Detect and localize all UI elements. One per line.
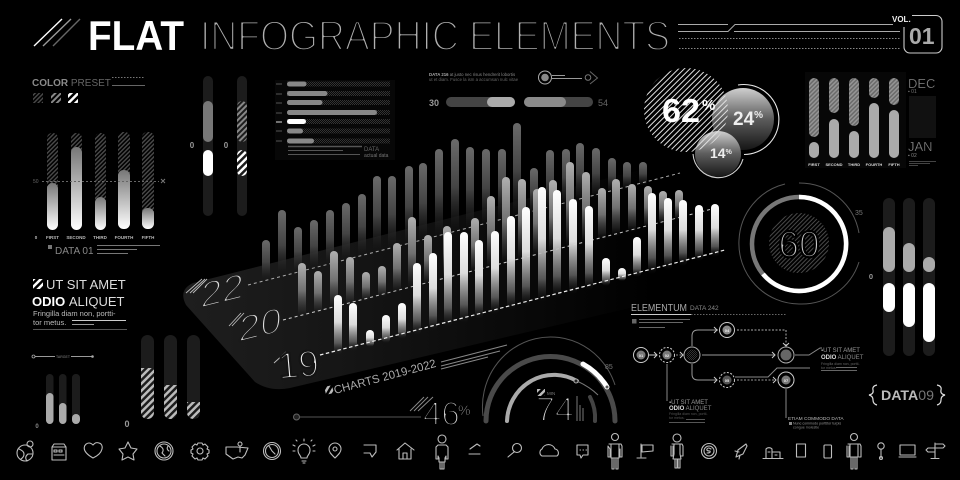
panel: color preset [32,78,145,103]
title: FLAT [88,12,184,59]
data09 label: DATA09 [881,387,934,403]
bar chart: five categories: THIRD [93,235,108,240]
flow diagram: 01 [639,353,644,358]
icon: gear [191,443,209,460]
bar chart: five categories: FIRST [46,235,59,240]
text block: data 216 with slider icon: DATA 216 at justo nec risus hendrerit lobortis [429,72,515,77]
icon: signpost [926,443,945,458]
flow note: ut sit amet right: ▪UT SIT AMET [821,348,860,354]
ring gauge 60: 60 [778,224,820,265]
flow diagram: 05 [725,378,730,383]
percentage bubbles: 14 [710,145,726,161]
icon: cloud [540,445,558,456]
bar chart: five categories: 50 [33,179,39,185]
date range dec to jan: ▪ 01 [908,89,917,95]
flow note: ut sit amet lower: ODIO ALIQUET [669,406,712,412]
3d bar chart [248,123,725,355]
text block: ut sit amet: Fringilla diam non, portti- [33,309,116,318]
charts caption [324,345,507,397]
flow note: etiam commodo: Nunc commodo porttitor turpis [793,422,841,426]
bar chart: five categories: 0 [35,235,38,240]
panel: horizontal bars: DATA [364,147,379,153]
range slider: 30 [429,98,439,108]
elementum heading [631,303,786,328]
bar chart: five categories: FIFTH [142,235,154,240]
panel: segmented bar chart: SECOND [825,162,843,167]
icon: flag [637,444,653,458]
text block: ut sit amet: tor metus. [33,318,66,327]
icon: earth [155,442,173,460]
icon: buildings [763,448,783,458]
date range dec to jan [908,76,936,166]
icon: globe with pin [17,441,33,461]
range slider [429,97,608,108]
icon: map with pin [226,442,248,459]
icon: clock [264,442,280,460]
icon: hat [469,444,480,454]
percentage bubbles: 62 [662,92,700,129]
date range dec to jan: JAN [908,139,933,154]
flow note: ut sit amet right [821,348,864,370]
year labels: 22 [200,266,245,316]
icon: star [119,442,137,460]
icon: house [397,443,414,459]
icon: speech bubble [577,445,588,458]
percentage bubbles: % [702,97,715,114]
bar chart: five categories [33,132,165,240]
range slider: 54 [598,98,608,108]
data 01 label [48,245,160,257]
back row bars, 2022 [262,123,647,284]
right vertical bars [869,198,935,356]
46 percent indicator [294,395,470,432]
percentage bubbles: % [726,149,733,156]
panel: segmented bar chart [805,72,906,168]
icon: location pin [329,443,341,458]
charts caption: CHARTS 2019-2022 [333,358,437,397]
icon: tablet [796,444,806,457]
text block: data 216 with slider icon: ut et diam. Fusce la ism a accumsan nulc vitae [429,77,519,82]
panel: segmented bar chart: FIFTH [888,162,900,167]
elementum heading: DATA 242 [690,305,719,312]
flow note: ut sit amet right: tor metus. [821,366,837,370]
icon: laptop [899,445,916,457]
panel: horizontal bars [275,80,395,160]
icon: phone [824,445,832,458]
vertical sliders: 0 [224,141,229,150]
icon: woman figure [436,435,448,469]
icon: megaphone shape [364,445,376,457]
panel: segmented bar chart: FIRST [808,162,820,167]
vertical sliders: 0 [190,141,195,150]
front row bars, 2019 [334,187,719,355]
icon: light bulb [293,439,315,463]
flow diagram: 02 [665,353,670,358]
semicircle gauge 74: MIN [547,391,555,396]
flow diagram [631,303,864,430]
flow diagram: 07 [784,378,789,383]
text block: ut sit amet [32,277,127,330]
year labels [186,266,321,387]
semicircle gauge 74 [482,337,615,429]
title: INFOGRAPHIC ELEMENTS [200,12,670,59]
middle row bars, 2020 [298,162,683,319]
ring gauge 60 [739,183,863,304]
icon: man figure [608,434,622,469]
flow note: ut sit amet lower: Fringilla diam non, portti- [669,412,708,416]
target bar chart: TARGET [56,355,71,359]
icon: woman figure two [671,434,683,468]
text block: data 216 with slider icon [429,71,598,84]
flow note: ut sit amet lower: ▪UT SIT AMET [669,400,708,406]
semicircle gauge 74: 85 [605,364,613,371]
icon: magnifier [508,444,522,457]
flow note: ut sit amet lower: tor metus. [669,416,685,420]
flow note: ut sit amet right: ODIO ALIQUET [821,355,864,361]
percentage bubbles [644,68,779,178]
text block: ut sit amet: UT SIT AMET [46,277,126,292]
year labels: 19 [276,343,321,387]
flow note: ut sit amet lower [669,400,712,422]
target bar chart [32,353,94,430]
flow diagram: 04 [725,328,730,333]
right vertical bars: 0 [869,272,873,281]
date range dec to jan: ▪ 02 [908,153,917,159]
text block: ut sit amet: ODIO ALIQUET [32,294,125,309]
flow note: etiam commodo: ETIAM COMMODO DATA [788,416,844,422]
volume badge and header rules [678,15,942,53]
flow note: ut sit amet right: Fringilla diam non, portti- [821,362,860,366]
icon row [17,434,945,469]
vertical sliders [190,76,247,216]
icon: rocket [735,444,747,459]
hatched bar chart: 0 [124,419,130,429]
bar chart: five categories: SECOND [66,235,86,240]
title [34,12,670,59]
elementum heading: ELEMENTUM [631,303,687,314]
percentage bubbles: 24 [733,109,754,130]
bar chart: five categories: FOURTH [115,235,133,240]
3d platform [183,170,740,389]
icon: heart [84,443,102,458]
panel: horizontal bars: actual data [364,153,389,159]
46 percent indicator: 46 [423,395,460,432]
icon: dollar coin [702,444,716,458]
date range dec to jan: DEC [908,76,935,91]
icon: shop [52,444,66,460]
icon: man figure two [847,434,861,469]
hatched bar chart [124,335,200,429]
data 01 label: DATA 01 [55,246,94,257]
volume badge and header rules: VOL. [892,15,911,24]
volume badge and header rules: 01 [909,23,935,49]
flow note: etiam commodo [788,416,844,430]
data09 label [869,385,945,405]
panel: segmented bar chart: THIRD [848,162,860,167]
ring gauge 60: 35 [855,210,863,217]
semicircle gauge 74: 74 [536,391,574,429]
46 percent indicator: % [458,402,470,418]
flow note: etiam commodo: congue molestie [793,426,819,430]
icon: key pin [878,443,884,460]
percentage bubbles: % [754,110,763,121]
panel: segmented bar chart: FOURTH [866,162,882,167]
year labels: 20 [238,300,283,350]
target bar chart: 0 [35,424,39,430]
panel: color preset: COLOR PRESET [32,78,111,89]
